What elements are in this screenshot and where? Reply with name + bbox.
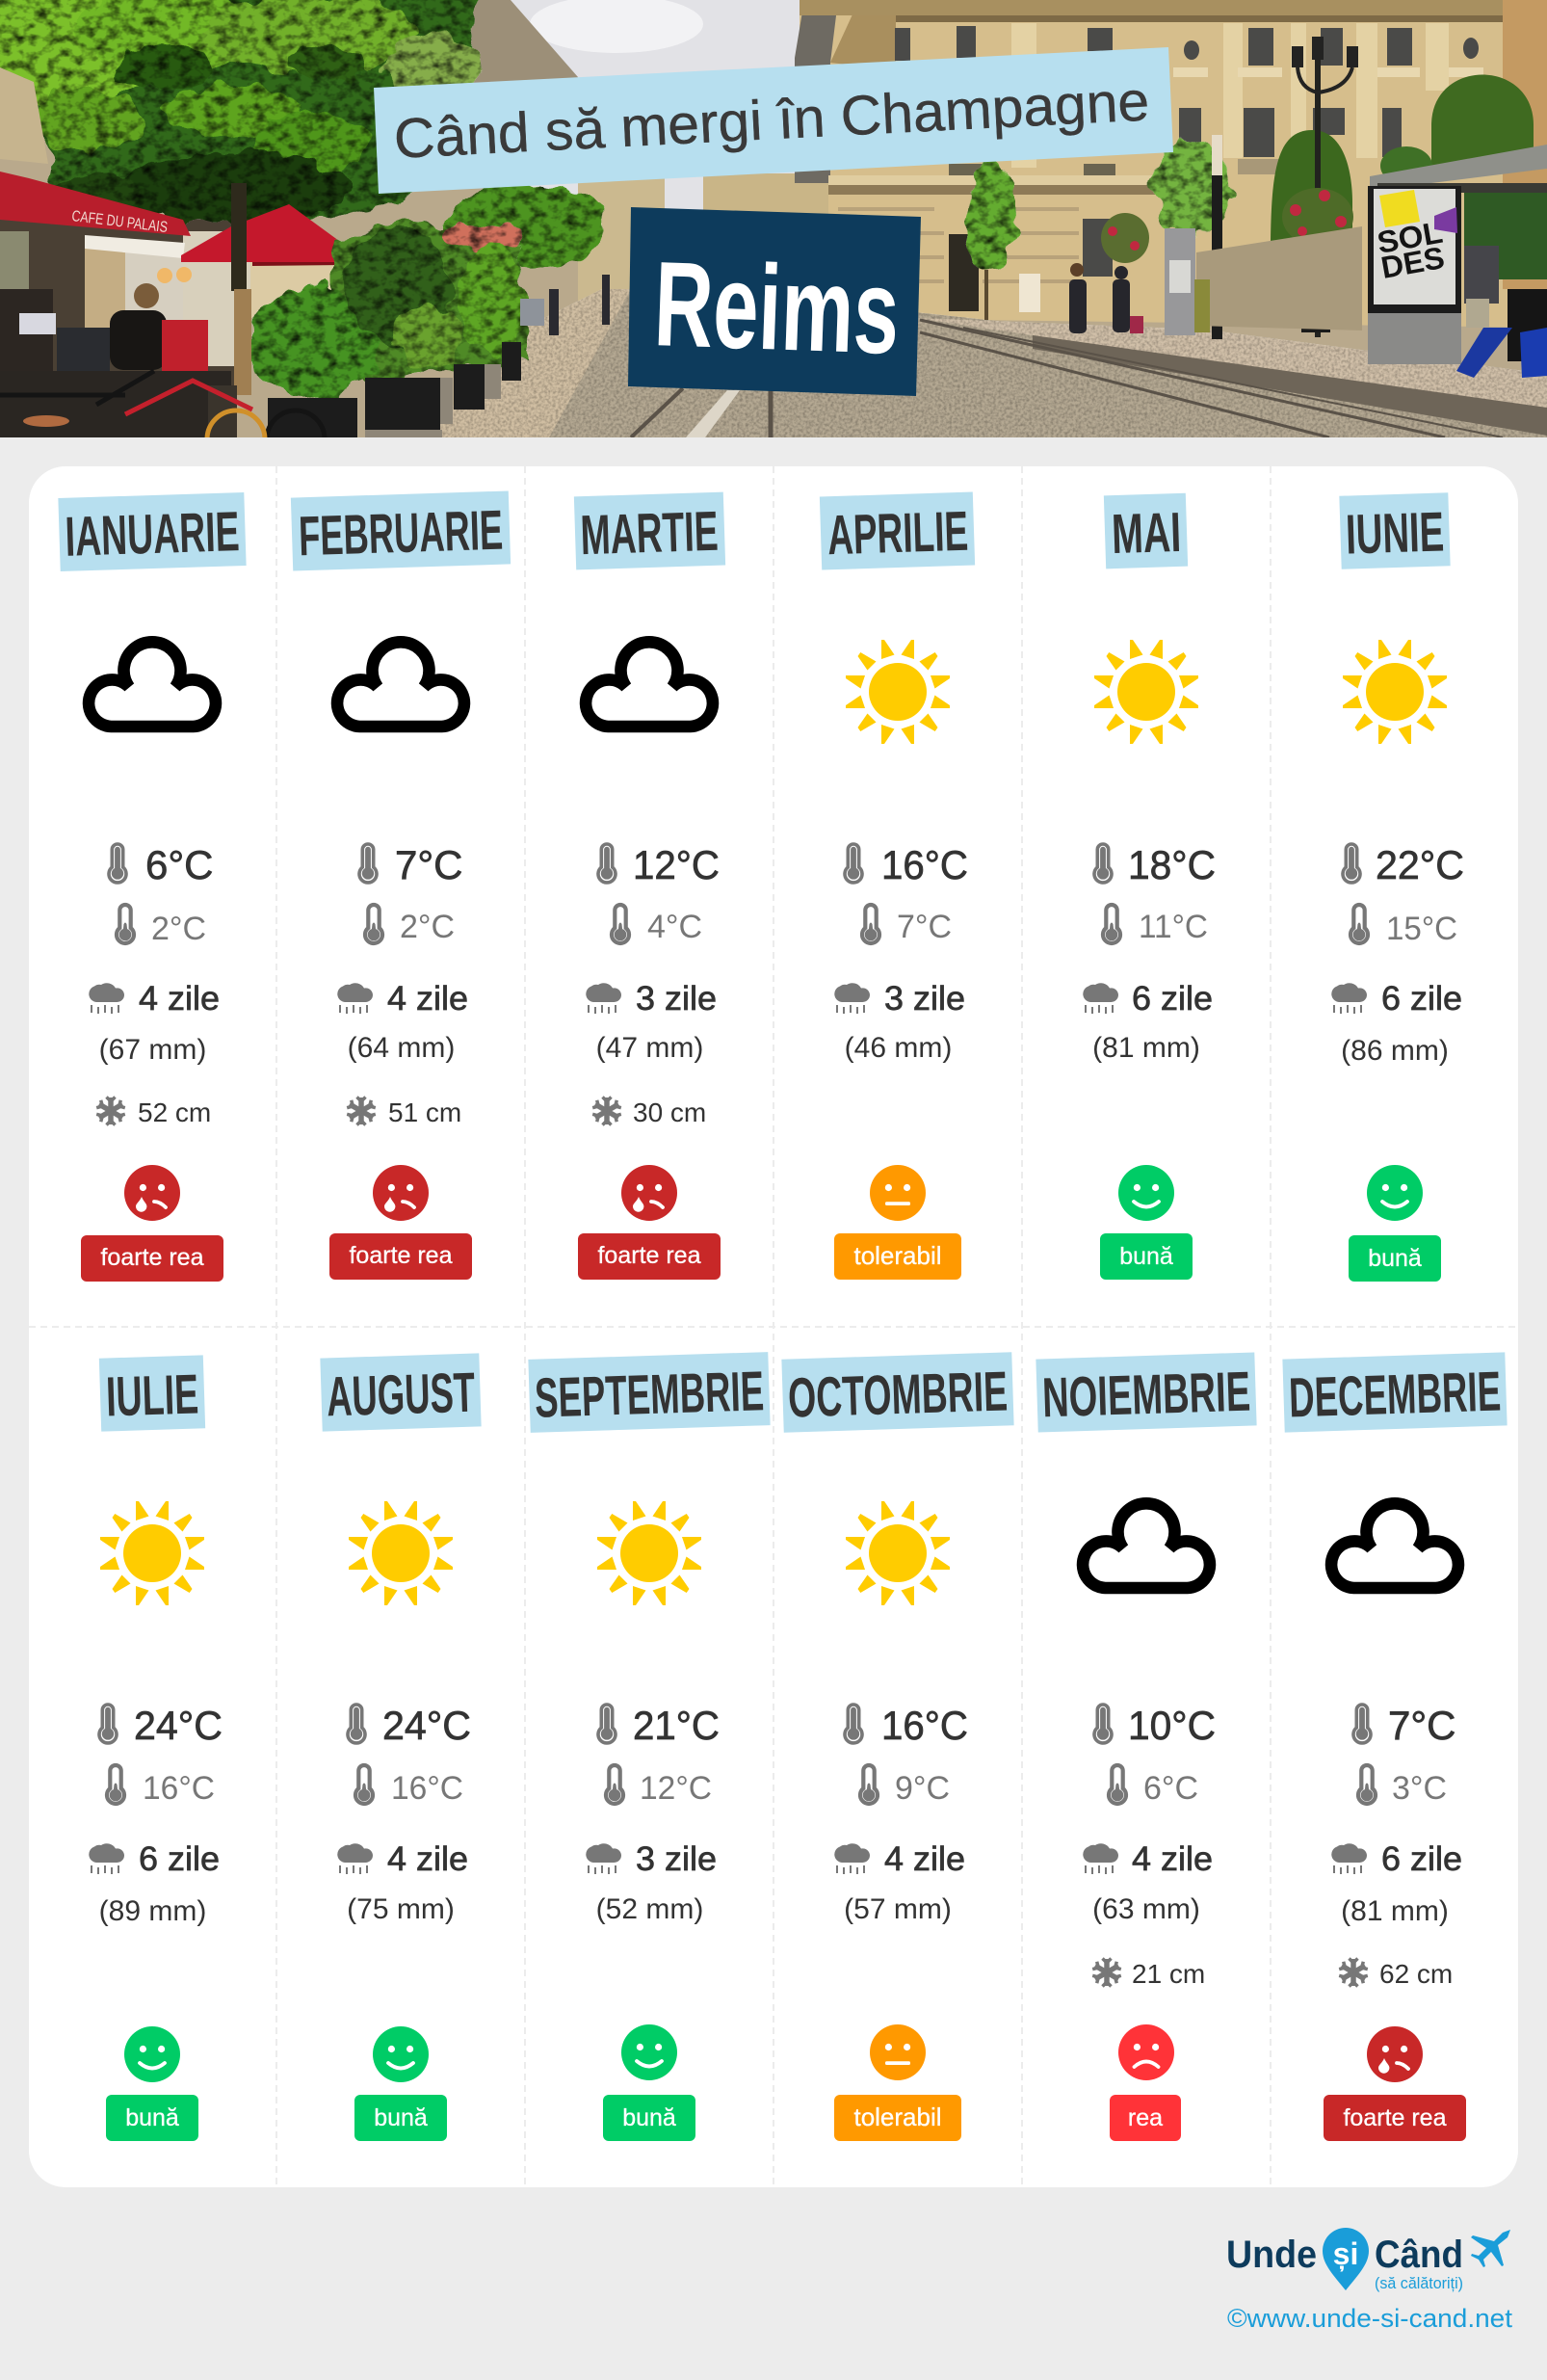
max temperature: 7°C <box>395 842 462 887</box>
rainfall: (63 mm) <box>1092 1893 1200 1925</box>
rainfall: (81 mm) <box>1341 1895 1449 1927</box>
max temperature <box>1353 1703 1456 1748</box>
icon: sun <box>349 1501 453 1605</box>
rain days: 3 zile <box>636 980 717 1018</box>
max temperature: 6°C <box>145 842 214 887</box>
rainfall: (46 mm) <box>845 1032 952 1064</box>
rainfall: (64 mm) <box>348 1032 455 1064</box>
bus shelter with SOLDES poster <box>1370 145 1547 186</box>
rating badge <box>1349 1235 1441 1282</box>
month heading: IANUARIE <box>65 500 241 569</box>
month: Iulie <box>89 1355 223 2141</box>
website credit: ©www.unde-si-cand.net <box>1227 2304 1513 2333</box>
rating badge: rea <box>1128 2104 1163 2131</box>
street and pavements <box>424 289 1547 437</box>
month heading <box>528 1352 771 1433</box>
max temperature: 12°C <box>633 842 720 887</box>
icon: plane <box>1471 2230 1510 2267</box>
max temperature <box>598 1703 720 1748</box>
month heading <box>291 490 511 571</box>
city banner: Reims <box>628 207 921 396</box>
rain days: 4 zile <box>387 1840 468 1878</box>
max temperature <box>109 842 214 887</box>
icon: cloud <box>337 642 464 727</box>
bushes, small trees and lamp <box>1431 75 1534 173</box>
rating face <box>621 2024 677 2080</box>
rain days <box>1083 1840 1213 1878</box>
rating badge <box>1100 1233 1193 1280</box>
rainfall: (81 mm) <box>1092 1032 1200 1064</box>
month: Mai <box>1083 493 1216 1280</box>
icon: sun <box>597 1501 701 1605</box>
month: Februarie <box>291 490 511 1280</box>
rating badge: tolerabil <box>853 1241 942 1270</box>
max temperature <box>845 1703 968 1748</box>
rating face <box>373 1165 429 1221</box>
rain days: 6 zile <box>1381 980 1462 1018</box>
logo: Unde și Când: (să călătoriți) <box>1375 2274 1463 2292</box>
min temperature: 2°C <box>400 909 455 945</box>
terrace plants <box>248 220 528 398</box>
people, chalkboard and bicycles <box>0 283 310 437</box>
icon: sun <box>846 640 950 744</box>
seated people <box>1456 246 1547 378</box>
rating badge: bună <box>622 2104 676 2131</box>
month: Septembrie <box>528 1352 771 2141</box>
min temperature <box>612 905 702 945</box>
icon: sun <box>100 1501 204 1605</box>
icon: cloud <box>1083 1503 1210 1588</box>
min temperature <box>1103 905 1208 945</box>
rating face <box>870 1165 926 1221</box>
max temperature: 22°C <box>1376 842 1464 887</box>
max temperature <box>598 842 720 887</box>
min temperature: 9°C <box>895 1770 950 1807</box>
title banner: Când să mergi în Champagne: Când să mergi în Champagne <box>392 69 1151 171</box>
min temperature <box>606 1765 712 1807</box>
rating badge <box>578 1233 721 1280</box>
max temperature: 24°C <box>382 1703 471 1748</box>
month heading: MAI <box>1111 501 1182 566</box>
snow: 52 cm <box>138 1097 211 1127</box>
foliage <box>0 0 604 271</box>
rating badge: bună <box>1119 1243 1173 1270</box>
month: Decembrie <box>1282 1352 1508 2141</box>
max temperature: 16°C <box>881 842 968 887</box>
min temperature <box>1109 1765 1198 1807</box>
month heading <box>1104 493 1188 569</box>
building facade <box>800 15 1508 328</box>
rain days: 4 zile <box>884 1840 965 1878</box>
icon: cloud <box>89 642 216 727</box>
month heading: APRILIE <box>826 500 969 567</box>
rating face <box>1367 1165 1423 1221</box>
month heading <box>820 492 975 569</box>
rain days: 4 zile <box>1132 1840 1213 1878</box>
min temperature <box>355 1765 463 1807</box>
distant street figures <box>520 275 610 335</box>
max temperature <box>359 842 462 887</box>
max temperature: 24°C <box>134 1703 223 1748</box>
month heading: IUNIE <box>1345 500 1445 567</box>
rating face <box>1118 1165 1174 1221</box>
rainfall: (47 mm) <box>596 1032 703 1064</box>
rating badge: foarte rea <box>349 1242 453 1269</box>
month heading: AUGUST <box>326 1362 476 1428</box>
min temperature: 15°C <box>1386 911 1457 947</box>
month: Octombrie <box>781 1352 1014 2141</box>
icon: sun <box>846 1501 950 1605</box>
min temperature: 16°C <box>143 1770 215 1807</box>
min temperature: 12°C <box>640 1770 712 1807</box>
rain days <box>586 1840 717 1878</box>
snow <box>347 1097 461 1127</box>
month heading <box>1036 1352 1257 1433</box>
rating badge <box>354 2095 447 2141</box>
min temperature: 2°C <box>151 911 206 947</box>
rain days <box>89 980 220 1018</box>
rating badge: foarte rea <box>1343 2104 1447 2131</box>
max temperature: 21°C <box>633 1703 720 1748</box>
rainfall: (89 mm) <box>99 1895 206 1927</box>
hero photo: Reims street: SOL <box>1375 215 1445 260</box>
rain days <box>1083 980 1213 1018</box>
rain days <box>834 1840 965 1878</box>
icon: cloud <box>1331 1503 1458 1588</box>
city banner: Reims: Reims <box>652 237 902 380</box>
rain days <box>586 980 717 1018</box>
month: Iunie <box>1331 492 1464 1282</box>
shop front under awning <box>0 219 234 385</box>
rating badge <box>1324 2095 1466 2141</box>
month heading: IULIE <box>105 1363 199 1428</box>
month: Noiembrie <box>1036 1352 1257 2141</box>
max temperature <box>845 842 968 887</box>
month heading <box>99 1355 205 1432</box>
snow: 21 cm <box>1132 1959 1205 1989</box>
month heading: MARTIE <box>580 500 720 567</box>
rating badge <box>834 1233 961 1280</box>
max temperature: 10°C <box>1128 1703 1216 1748</box>
logo: Unde și Când: și <box>1333 2236 1358 2271</box>
wall lamps <box>157 267 192 283</box>
pedestrians <box>1069 263 1210 333</box>
min temperature: 4°C <box>647 909 702 945</box>
rating badge <box>81 1235 223 1282</box>
logo: Unde și Când: Când <box>1375 2234 1463 2276</box>
red parasol <box>181 204 345 262</box>
snow: 62 cm <box>1379 1959 1453 1989</box>
rain days <box>1331 980 1462 1018</box>
rating face <box>124 1165 180 1221</box>
rating face <box>621 1165 677 1221</box>
max temperature: 7°C <box>1388 1703 1456 1748</box>
min temperature <box>117 905 206 947</box>
logo: Unde și Când: Unde <box>1226 2234 1317 2276</box>
min temperature: 16°C <box>391 1770 463 1807</box>
month heading <box>574 492 725 569</box>
month heading: OCTOMBRIE <box>787 1360 1009 1430</box>
rain days <box>89 1840 220 1878</box>
rating badge <box>603 2095 695 2141</box>
rain days: 4 zile <box>139 980 220 1018</box>
rating badge: bună <box>374 2104 428 2131</box>
snow <box>592 1097 706 1127</box>
panel: climate card <box>29 466 1518 2187</box>
rating face <box>124 2026 180 2082</box>
month heading <box>1339 492 1451 569</box>
rating badge <box>1110 2095 1181 2141</box>
month heading: FEBRUARIE <box>298 499 504 568</box>
max temperature: 16°C <box>881 1703 968 1748</box>
rain days <box>337 980 468 1018</box>
rain days: 6 zile <box>1381 1840 1462 1878</box>
snow <box>96 1097 211 1127</box>
rating badge: bună <box>125 2104 179 2131</box>
hero photo: Reims street <box>0 0 1547 468</box>
snow <box>1339 1958 1453 1989</box>
rating badge <box>106 2095 198 2141</box>
rain days: 6 zile <box>139 1840 220 1878</box>
rating badge <box>329 1233 472 1280</box>
min temperature: 6°C <box>1143 1770 1198 1807</box>
icon: sun <box>1343 640 1447 744</box>
month heading <box>58 492 247 571</box>
rainfall: (67 mm) <box>99 1034 206 1066</box>
min temperature <box>1350 905 1457 947</box>
min temperature: 3°C <box>1392 1770 1447 1807</box>
rainfall: (75 mm) <box>347 1893 455 1925</box>
rain days: 4 zile <box>387 980 468 1018</box>
snow: 30 cm <box>633 1097 706 1127</box>
min temperature: 11°C <box>1139 909 1208 945</box>
icon: map pin <box>1323 2228 1369 2290</box>
rain days: 3 zile <box>636 1840 717 1878</box>
month: Ianuarie <box>58 492 247 1282</box>
month: Martie <box>574 492 725 1280</box>
month: August <box>320 1353 482 2141</box>
month heading: NOIEMBRIE <box>1041 1361 1251 1429</box>
rainfall: (52 mm) <box>596 1893 703 1925</box>
rating face <box>1118 2024 1174 2080</box>
title banner: Când să mergi în Champagne <box>374 47 1173 194</box>
hero photo: Reims street: DES <box>1378 240 1447 285</box>
icon: cloud <box>586 642 713 727</box>
cafe awning <box>0 172 191 236</box>
min temperature: 7°C <box>897 909 952 945</box>
month heading <box>320 1353 482 1432</box>
rating badge: bună <box>1368 1245 1422 1272</box>
stone wall and kiosk <box>1196 226 1362 331</box>
snow <box>1092 1958 1205 1989</box>
rating badge: foarte rea <box>100 1244 204 1271</box>
rain days <box>337 1840 468 1878</box>
rain days: 6 zile <box>1132 980 1213 1018</box>
rain days: 3 zile <box>884 980 965 1018</box>
hero photo: Reims street: CAFE DU PALAIS <box>71 208 169 236</box>
logo: Unde și Când <box>1226 2228 1510 2292</box>
rain days <box>834 980 965 1018</box>
rating face <box>373 2026 429 2082</box>
rating face <box>870 2024 926 2080</box>
min temperature <box>365 905 455 945</box>
min temperature <box>107 1765 215 1807</box>
month: Aprilie <box>820 492 975 1280</box>
rating badge: tolerabil <box>853 2102 942 2131</box>
max temperature: 18°C <box>1128 842 1216 887</box>
rating face <box>1367 2026 1423 2082</box>
rain days <box>1331 1840 1462 1878</box>
rainfall: (86 mm) <box>1341 1035 1449 1067</box>
rainfall: (57 mm) <box>844 1893 952 1925</box>
snow: 51 cm <box>388 1097 461 1127</box>
min temperature <box>862 905 952 945</box>
month heading <box>781 1352 1014 1433</box>
rating badge: foarte rea <box>597 1242 701 1269</box>
icon: sun <box>1094 640 1198 744</box>
rating badge <box>834 2095 961 2141</box>
min temperature <box>860 1765 950 1807</box>
month heading: SEPTEMBRIE <box>534 1360 765 1430</box>
min temperature <box>1358 1765 1447 1807</box>
